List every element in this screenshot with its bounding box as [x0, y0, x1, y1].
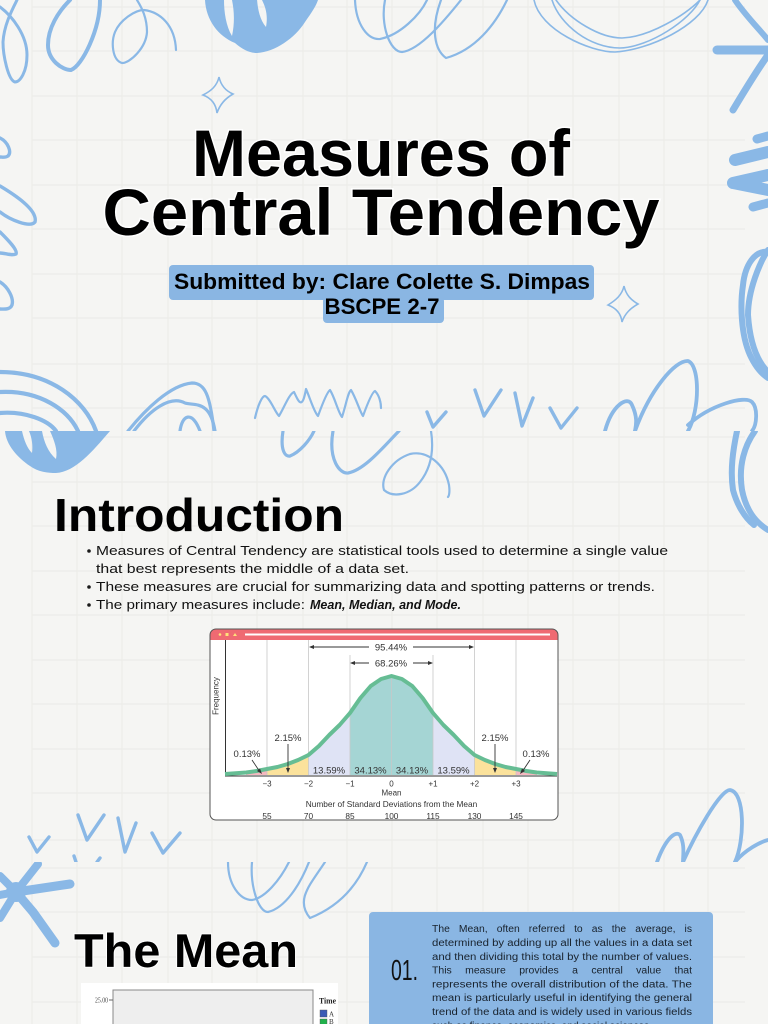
x axis labels [262, 780, 523, 821]
slide 2 scribble decorations [5, 431, 768, 862]
x axis labels: 0 [389, 780, 394, 788]
x axis labels: 145 [509, 811, 523, 821]
panel body text: represents the overall distribution of the data. The [432, 980, 693, 990]
panel body text: determined by adding up all the values in a data set [432, 938, 692, 949]
axis label: Frequency: Frequency [212, 677, 220, 715]
icon: sparkle star right [608, 286, 638, 322]
chart: bar chart fragment: A [329, 1010, 334, 1018]
scribble: pointed loops [228, 862, 367, 918]
panel body text: mean is particularly useful in identifying the general [432, 993, 692, 1004]
scribble: top filled blob [205, 0, 318, 53]
bell curve line [225, 676, 557, 774]
area percent labels [234, 734, 550, 774]
title [102, 116, 660, 249]
scribble: zigzag [255, 389, 381, 418]
tail arrows [252, 744, 530, 774]
area percent labels: 2.15% [482, 733, 509, 744]
title: Central Tendency [102, 175, 660, 249]
x axis labels: +1 [428, 780, 438, 788]
scribble: top-right star strokes [717, 0, 768, 110]
scribble: top-left loops [0, 0, 176, 82]
scribble: check marks [427, 390, 577, 428]
subtitle: author highlight: BSCPE 2-7 [324, 294, 440, 319]
area percent labels: 0.13% [523, 749, 550, 760]
x axis labels: Mean [381, 788, 402, 798]
scribble: top pointed loops [355, 0, 507, 58]
x axis labels: 55 [262, 811, 272, 821]
bullet list: introduction: The primary measures include: [96, 597, 305, 612]
chart area fills [246, 676, 537, 775]
scribble: bottom arch tangle [128, 383, 215, 431]
scribble: lower right loops [657, 790, 768, 862]
slide 1 scribble decorations [0, 0, 768, 431]
bullet list: introduction: Measures of Central Tendency are statistical tools used to determine a single value [96, 543, 668, 558]
icon: sparkle star [203, 77, 233, 113]
scribble: asterisk [0, 864, 70, 943]
scribble: ring [383, 431, 449, 497]
panel body text: trend of the data and is widely used in various fields [432, 1007, 692, 1018]
x axis labels: Number of Standard Deviations from the Mean [306, 799, 478, 809]
x axis labels: −1 [345, 780, 355, 788]
chart: bar chart fragment [81, 983, 338, 1024]
area percent labels: 13.59% [313, 766, 346, 776]
heading: The Mean: The Mean [74, 924, 298, 977]
slide 3 scribble decorations [0, 862, 367, 943]
bullet list: introduction: Mean, Median, and Mode. [310, 597, 461, 612]
span labels: 95.44% and 68.26%: 68.26% [375, 658, 408, 670]
panel body text [432, 924, 693, 1024]
scribble: right oval [741, 250, 768, 378]
chart window header [210, 629, 558, 640]
x axis labels: 100 [385, 811, 399, 821]
chart: bar chart fragment: Time [319, 996, 336, 1006]
area percent labels: 0.13% [234, 749, 261, 760]
scribble: top U loops [282, 431, 399, 473]
subtitle: author highlight [169, 265, 594, 323]
area percent labels: 34.13% [396, 766, 429, 776]
panel: mean description [369, 912, 713, 1024]
panel number 01: 01. [391, 955, 418, 987]
x axis labels: +3 [511, 780, 521, 788]
x axis labels: 70 [304, 811, 313, 821]
scribble: top arcs [534, 0, 708, 52]
span labels: 95.44% and 68.26%: 95.44% [375, 642, 408, 654]
scribble: bottom-right loops [605, 361, 756, 431]
bullet list: introduction: These measures are crucial for summarizing data and spotting patterns or trends. [96, 579, 655, 594]
heading: Introduction: Introduction [54, 489, 344, 541]
scribble: lower left check marks [29, 815, 180, 862]
x axis labels: +2 [470, 780, 480, 788]
area percent labels: 13.59% [437, 766, 470, 776]
scribble: right oval [732, 431, 768, 530]
x axis labels: 115 [426, 811, 440, 821]
area percent labels: 2.15% [275, 733, 302, 744]
span labels: 95.44% and 68.26% [309, 644, 474, 666]
x axis labels: −3 [262, 780, 272, 788]
x axis labels: 130 [468, 811, 482, 821]
area percent labels: 34.13% [354, 766, 387, 776]
panel body text: This measure provides a central value that [432, 966, 692, 976]
chart: bar chart fragment: 25.00 [95, 996, 108, 1004]
scribble: bottom-left arches [0, 372, 96, 431]
x axis labels: −2 [304, 780, 314, 788]
panel body text: and then dividing this total by the number of values. [432, 952, 692, 963]
title: Measures of [192, 116, 571, 190]
chart: normal distribution bell curve [210, 629, 558, 821]
x axis labels: 85 [345, 811, 355, 821]
bullet list: introduction: that best represents the middle of a data set. [96, 561, 409, 576]
panel body text: The Mean, often referred to as the average, is [432, 924, 692, 935]
subtitle: author highlight: Submitted by: Clare Colette S. Dimpas [174, 269, 590, 294]
scribble: left loops [0, 138, 35, 309]
scribble: filled blob [5, 431, 110, 473]
bullet list: introduction [87, 543, 668, 612]
scribble: right strokes [733, 136, 768, 207]
